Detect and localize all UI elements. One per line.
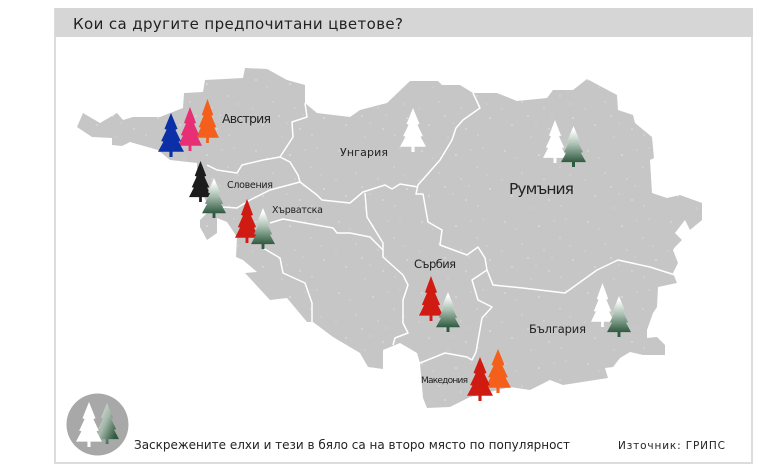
tree: white bbox=[76, 402, 102, 447]
label: Slovenia: Словения bbox=[227, 180, 273, 191]
tree: frosted bbox=[202, 178, 226, 218]
tree: orange bbox=[485, 349, 511, 393]
trees: Slovenia bbox=[189, 161, 226, 218]
tree: Hungary white bbox=[400, 108, 426, 152]
tree: frosted bbox=[251, 208, 275, 249]
legend icon bbox=[66, 394, 128, 456]
map landmass bbox=[77, 68, 702, 408]
legend text: Заскрежените елхи и тези в бяло са на второ място по популярност bbox=[134, 438, 570, 452]
tree: blue bbox=[158, 113, 184, 157]
tree: red bbox=[467, 357, 493, 401]
label: Croatia: Хърватска bbox=[272, 205, 323, 216]
map of countries bbox=[77, 68, 702, 408]
trees: Austria bbox=[158, 99, 219, 157]
title bar bbox=[55, 8, 753, 37]
tree: frosted bbox=[436, 292, 460, 332]
trees: Macedonia bbox=[467, 349, 511, 401]
label: Hungary: Унгария bbox=[340, 146, 388, 159]
tree: white bbox=[543, 120, 567, 163]
trees: Bulgaria bbox=[591, 283, 631, 337]
legend circle bbox=[66, 394, 128, 456]
label: Romania: Румъния bbox=[509, 180, 574, 198]
source: Източник: ГРИПС bbox=[618, 440, 725, 452]
country labels bbox=[222, 111, 586, 386]
label: Serbia: Сърбия bbox=[414, 257, 456, 271]
tree: frosted bbox=[95, 403, 119, 444]
tree: frosted bbox=[561, 126, 586, 167]
tree: pink bbox=[178, 107, 202, 151]
country borders bbox=[207, 93, 675, 363]
tree: black bbox=[189, 161, 212, 202]
title: Кои са другите предпочитани цветове? bbox=[73, 15, 403, 33]
label: Bulgaria: България bbox=[529, 322, 586, 336]
trees: Romania bbox=[543, 120, 586, 167]
tree: red bbox=[419, 276, 443, 321]
tree: orange bbox=[196, 99, 219, 143]
label: Austria: Австрия bbox=[222, 111, 271, 126]
trees: Serbia bbox=[419, 276, 460, 332]
tree: white bbox=[591, 283, 614, 327]
label: Macedonia: Македония bbox=[421, 376, 468, 386]
tree: frosted bbox=[607, 296, 631, 337]
tree: red bbox=[235, 199, 259, 243]
trees: Croatia bbox=[235, 199, 275, 249]
